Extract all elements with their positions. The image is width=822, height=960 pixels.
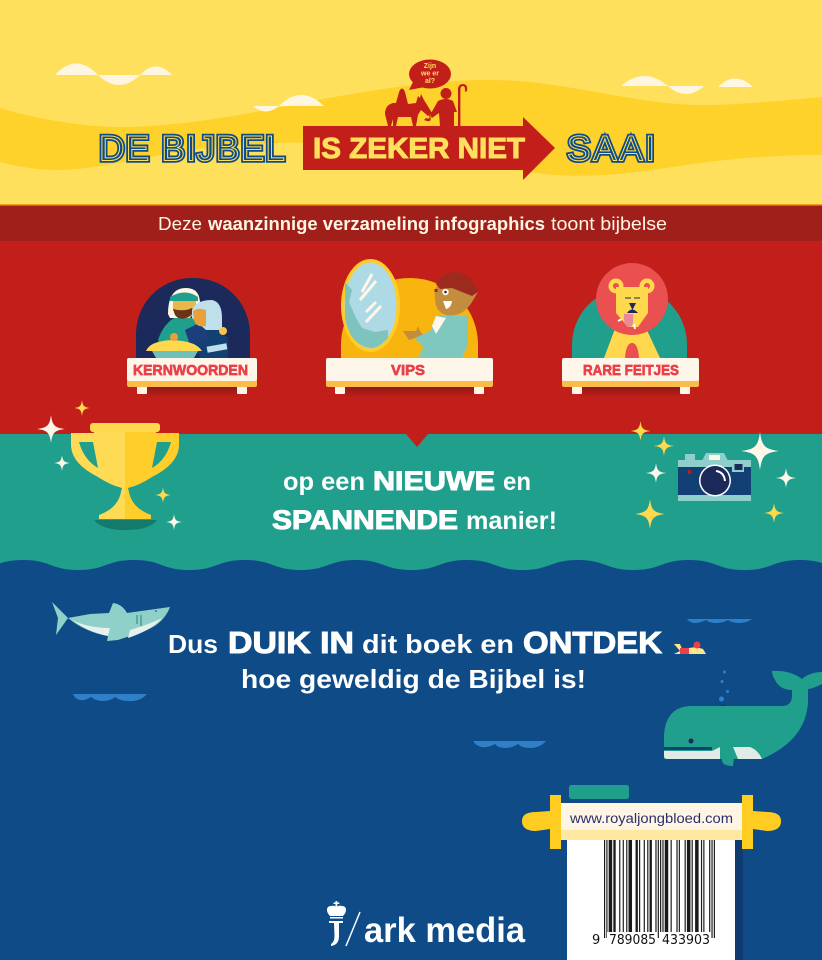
panel: vips	[326, 259, 493, 397]
panel: red section	[0, 205, 822, 434]
illustration: lion	[596, 263, 668, 358]
panel: blue section	[0, 560, 822, 960]
text: nieuwe en spannende: SPANNENDE	[272, 505, 458, 535]
barcode number: 9	[592, 933, 600, 948]
title: De Bijbel: DE BIJBEL	[99, 128, 285, 168]
logo: ark media: ark media	[364, 911, 526, 950]
icon: travellers silhouette with speech bubble	[385, 60, 467, 126]
mirror	[341, 259, 400, 352]
panel: intro band: Deze	[158, 214, 202, 234]
text: nieuwe en spannende	[272, 466, 557, 535]
text: duik in: dit boek en	[362, 629, 514, 659]
panel: kernwoorden	[127, 278, 257, 397]
plaque: KERNWOORDEN	[133, 362, 248, 379]
boy	[403, 272, 478, 358]
text: nieuwe en spannende: NIEUWE	[373, 466, 495, 496]
panel: teal section	[0, 434, 822, 576]
title: Saai: SAAI	[567, 128, 655, 168]
speech bubble: we er	[420, 70, 439, 78]
text: duik in: ONTDEK	[523, 625, 663, 660]
barcode bars	[604, 840, 715, 938]
text: duik in: hoe geweldig de Bijbel is!	[241, 664, 586, 694]
illustration: Joseph and Mary with manger	[146, 288, 228, 358]
icon: whale	[664, 670, 822, 766]
clouds	[55, 64, 753, 112]
text: nieuwe en spannende: en	[503, 468, 531, 496]
speech bubble: al?	[425, 78, 435, 85]
icon: swimmer	[674, 642, 706, 654]
scroll with website	[522, 785, 781, 849]
arch	[341, 278, 478, 358]
title: Saai: SAAI	[567, 128, 655, 168]
text: nieuwe en spannende: manier!	[466, 507, 557, 535]
barcode label	[567, 838, 743, 960]
icon: trophy	[71, 423, 179, 530]
pointer triangle	[406, 434, 428, 447]
speech bubble	[409, 60, 451, 90]
speech bubble: Zijn	[424, 63, 436, 70]
arch	[136, 278, 250, 358]
sparkles: camera	[630, 421, 796, 529]
shepherd with staff	[424, 84, 467, 126]
barcode number: 433903	[662, 933, 710, 948]
text: nieuwe en spannende: op een	[283, 468, 365, 496]
water ripples	[73, 619, 752, 748]
arch	[572, 288, 687, 358]
panel: intro band	[0, 204, 822, 241]
icon: camera	[678, 453, 751, 501]
panel: intro band: waanzinnige verzameling infographics	[207, 214, 545, 234]
logo: ark media	[327, 901, 526, 950]
text: duik in: DUIK IN	[228, 625, 354, 660]
plaque: VIPS	[391, 362, 425, 379]
icon: crown and J	[327, 901, 360, 946]
text: duik in: Dus	[168, 629, 218, 659]
plaque	[326, 358, 493, 397]
donkey with rider	[385, 88, 432, 126]
title: De Bijbel: DE BIJBEL	[99, 128, 285, 168]
barcode number: 789085	[609, 933, 656, 948]
sparkles: trophy	[37, 400, 182, 530]
arrow banner: is zeker niet: IS ZEKER NIET	[313, 133, 525, 165]
scroll with website: www.royaljongbloed.com	[569, 811, 733, 826]
barcode number	[592, 932, 710, 948]
panel: rare feitjes	[562, 263, 699, 397]
arrow banner: is zeker niet	[303, 117, 555, 180]
panel: intro band: toont bijbelse	[551, 214, 667, 234]
text: duik in	[168, 625, 663, 694]
plaque: RARE FEITJES	[583, 362, 679, 379]
icon: shark	[52, 602, 170, 641]
panel: yellow desert sky	[0, 0, 822, 206]
